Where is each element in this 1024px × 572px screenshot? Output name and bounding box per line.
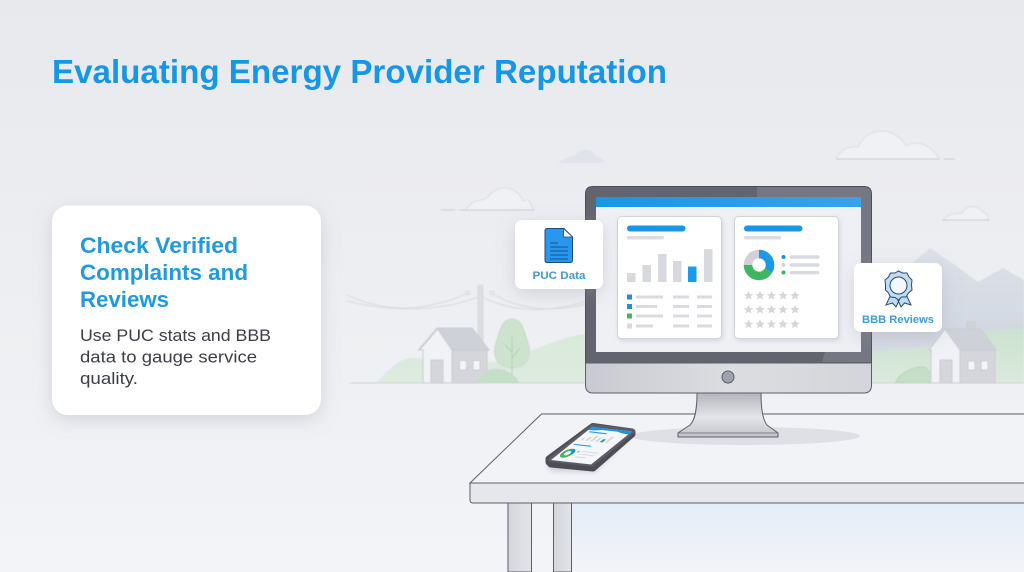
right dashboard card [734, 216, 838, 338]
monitor [586, 186, 872, 437]
panel heading: Reviews [80, 287, 169, 312]
phone shadow [546, 434, 632, 473]
green hills right [872, 329, 1024, 383]
panel body text: Use PUC stats and BBB [80, 326, 271, 345]
bush right [895, 367, 938, 383]
donut chart [748, 254, 770, 276]
house right [929, 322, 996, 383]
donut legend [782, 255, 786, 259]
screen blue bar [596, 197, 861, 207]
utility pole and wires [347, 285, 590, 343]
left dashboard card [618, 216, 722, 338]
monitor stand [678, 393, 778, 437]
table rows [627, 294, 712, 328]
title: Evaluating Energy Provider Reputation [52, 54, 667, 91]
panel heading: Check Verified [80, 233, 238, 258]
label: PUC Data [532, 270, 586, 282]
tree [477, 319, 529, 383]
phone body [551, 426, 632, 464]
icon: award ribbon [885, 271, 912, 307]
area under desk [571, 503, 1024, 572]
mountains [870, 248, 1024, 383]
ground line [349, 382, 1024, 384]
desk front edge [470, 483, 1024, 503]
screen [596, 197, 861, 352]
desk legs [508, 503, 532, 572]
panel body text: quality. [80, 369, 138, 388]
camera button [722, 371, 734, 383]
icon: document [545, 228, 572, 262]
phone side [549, 426, 632, 468]
phone screen [551, 427, 632, 464]
panel heading: Complaints and [80, 260, 248, 285]
bar chart [627, 249, 712, 282]
desk top surface [470, 414, 1024, 483]
panel: check verified complaints [52, 206, 321, 415]
monitor chin [586, 363, 872, 393]
house left [419, 328, 489, 383]
panel heading [80, 233, 248, 312]
desk [470, 414, 1024, 572]
panel body text [80, 326, 271, 388]
star ratings [744, 291, 800, 328]
clouds [466, 131, 989, 220]
background landscape [347, 131, 1024, 383]
callout: BBB Reviews [854, 263, 942, 332]
green hills left [376, 334, 585, 383]
panel body text: data to gauge service [80, 348, 257, 366]
smartphone [546, 426, 632, 473]
callout: PUC Data [515, 220, 603, 289]
monitor bezel [586, 186, 872, 363]
monitor shadow on desk [630, 427, 860, 445]
label: BBB Reviews [862, 314, 934, 326]
